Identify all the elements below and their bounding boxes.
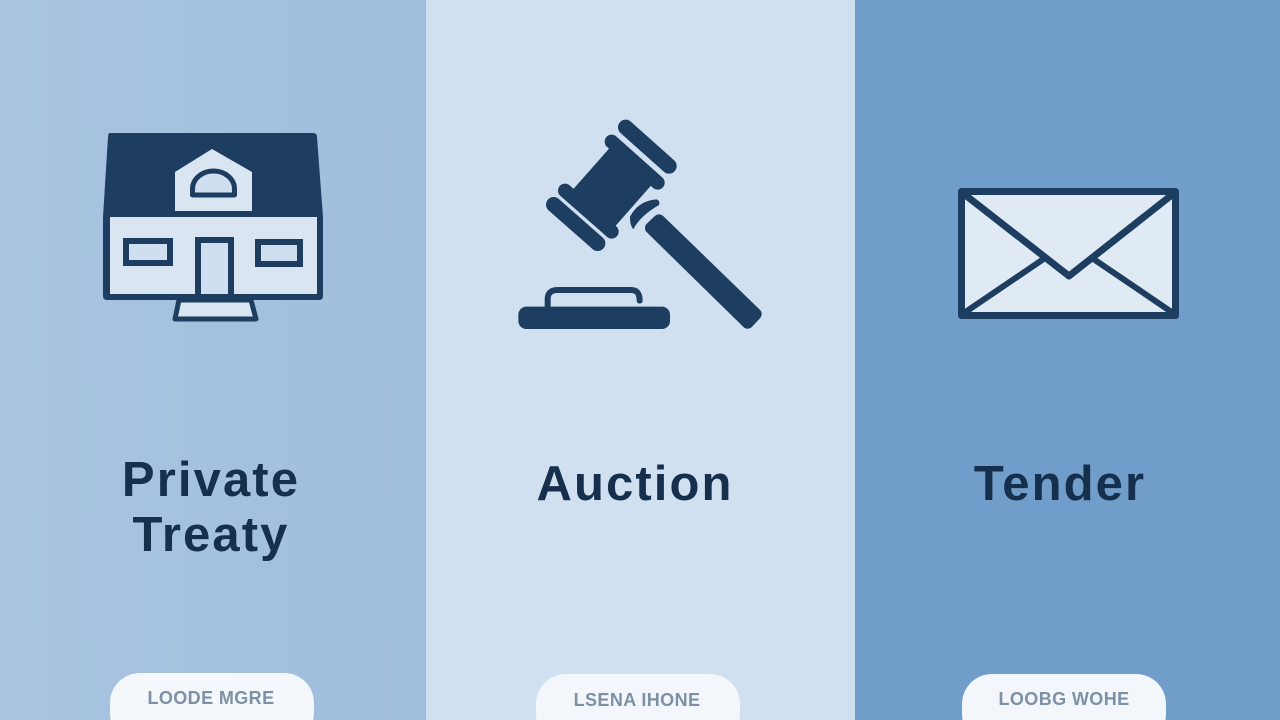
heading line: treaty: Treaty [133, 508, 289, 562]
panel: private treaty [0, 0, 426, 720]
heading: private treaty: Private [122, 453, 300, 507]
icon: house [103, 133, 323, 319]
button: private treaty: LOODE MGRE [147, 688, 275, 708]
panel: tender [855, 0, 1280, 720]
button: tender [962, 674, 1166, 720]
icon: envelope [962, 192, 1176, 316]
heading: auction: Auction [536, 457, 734, 511]
button: tender: LOOBG WOHE [998, 689, 1130, 709]
button: auction: LSENA IHONE [574, 690, 700, 710]
panel: auction [426, 0, 855, 720]
button: private treaty [110, 673, 314, 720]
button: auction [536, 674, 740, 720]
icon: gavel [518, 127, 756, 329]
heading: tender: Tender [974, 457, 1146, 511]
